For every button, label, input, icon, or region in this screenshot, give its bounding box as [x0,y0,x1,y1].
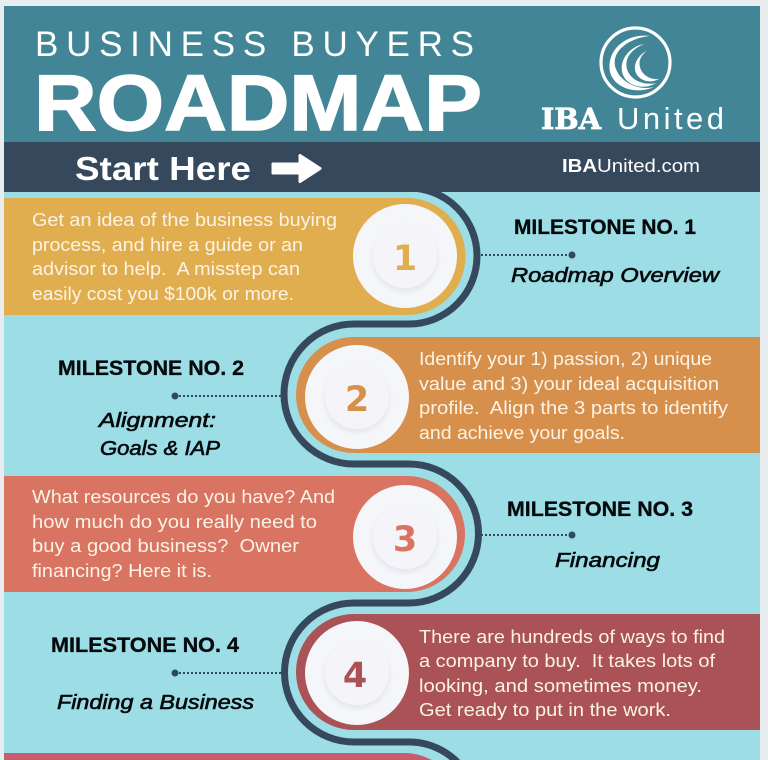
milestone 2 label: Alignment: [98,410,216,432]
milestone 2 text: Identify your 1) passion, 2) unique [419,349,712,369]
milestone 2 label [58,357,284,460]
title: business buyers: BUSINESS BUYERS [35,25,474,64]
milestone 4 text: There are hundreds of ways to find [419,627,725,647]
milestone 1 text: advisor to help. A misstep can [32,259,300,279]
road path [284,188,478,760]
milestone 2 text: value and 3) your ideal acquisition [419,374,719,394]
number 1 [353,204,457,308]
milestone 3 text: how much do you really need to [32,512,317,532]
title: roadmap: ROADMAP [34,58,482,147]
milestone 4 text: looking, and sometimes money. [419,676,702,696]
logo wordmark IBA: IBA [541,102,601,136]
number 4: 4 [343,656,367,696]
header banner [4,6,760,147]
milestone 4 text [419,627,725,720]
milestone 3 text: financing? Here it is. [32,561,212,581]
website: IBAUnited.com [562,156,700,176]
milestone 1 band [4,198,465,315]
milestone 2 text: and achieve your goals. [419,423,625,443]
milestone 2 band [296,337,760,453]
icon: IBA United swirl logo [601,28,670,97]
milestone 5 band [4,753,445,760]
milestone 1 text: Get an idea of the business buying [32,210,337,230]
milestone 1 text: easily cost you $100k or more. [32,284,294,304]
number 2: 2 [345,380,369,420]
number 2 [305,345,409,449]
milestone 1 label: Roadmap Overview [511,265,721,287]
milestone 2 text [419,349,728,443]
milestone 1 label [481,216,721,287]
milestone 3 text: buy a good business? Owner [32,536,299,556]
start here label: Start Here [75,150,251,187]
milestone 1 text: process, and hire a guide or an [32,235,303,255]
milestone 4 text: Get ready to put in the work. [419,700,671,720]
milestone 4 band [296,614,760,730]
milestone 3 text [32,487,335,581]
logo wordmark United: United [617,101,724,136]
navigation bar [4,142,760,192]
milestone 4 text: a company to buy. It takes lots of [419,651,716,671]
milestone 2 label: MILESTONE NO. 2 [58,357,244,380]
number 3: 3 [393,520,417,560]
milestone 4 label: Finding a Business [57,692,254,714]
milestone 3 band [4,476,465,592]
milestone 2 label: Goals & IAP [100,438,221,460]
milestone 3 label [481,498,693,572]
arrow [273,156,320,182]
milestone 4 label [51,634,284,714]
milestone 3 label: Financing [555,550,660,572]
milestone 3 label: MILESTONE NO. 3 [507,498,693,521]
number 4 [305,621,409,725]
milestone 1 label: MILESTONE NO. 1 [514,216,696,239]
number 1: 1 [393,239,417,279]
milestone 3 text: What resources do you have? And [32,487,335,507]
milestone 2 text: profile. Align the 3 parts to identify [419,398,728,418]
milestone 1 text [32,210,337,304]
milestone 4 label: MILESTONE NO. 4 [51,634,239,657]
number 3 [353,485,457,589]
